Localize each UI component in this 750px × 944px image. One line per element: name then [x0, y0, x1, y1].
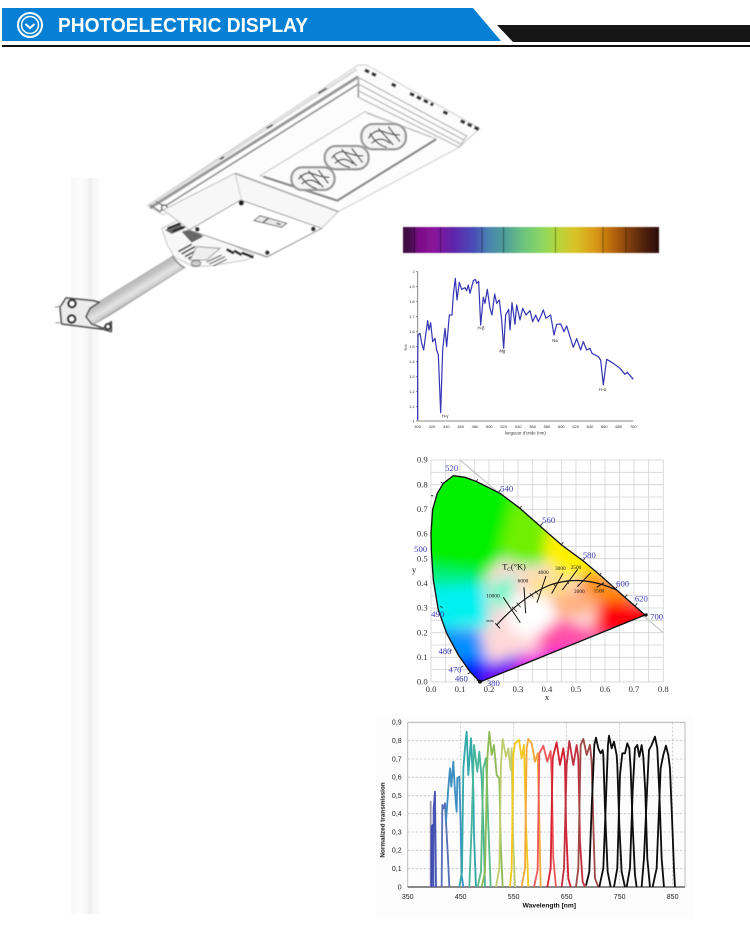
x axis numbers: 700 — [630, 424, 637, 429]
title: PHOTOELECTRIC DISPLAY — [58, 15, 309, 37]
line labels: H-α — [599, 387, 607, 392]
plot frame — [408, 722, 685, 887]
spectrum curve — [418, 278, 633, 420]
diagonal line — [460, 460, 663, 633]
x axis numbers: 0.2 — [484, 684, 494, 694]
y axis numbers: 0,5 — [392, 793, 402, 800]
x axis numbers: 580 — [544, 424, 551, 429]
y axis numbers: 0.7 — [417, 504, 428, 514]
y axis numbers: 0,3 — [392, 829, 402, 836]
lamp: top plate — [147, 65, 480, 215]
x axis title: Wavelength [nm] — [523, 903, 576, 910]
CIE chromaticity diagram — [412, 457, 668, 700]
x axis numbers: 0.8 — [658, 684, 669, 694]
x axis numbers — [402, 894, 679, 901]
x axis numbers: 450 — [455, 894, 467, 901]
line labels — [442, 325, 607, 418]
locus ticks — [431, 479, 647, 682]
black rule — [2, 45, 750, 47]
x axis numbers: 440 — [443, 424, 450, 429]
y axis numbers: 1,6 — [409, 329, 415, 334]
spectral locus outline — [431, 476, 645, 682]
line labels: Mg — [499, 349, 506, 354]
wavelength labels: 500 — [414, 544, 427, 554]
y axis title: Normalized transmission — [380, 782, 387, 858]
isotherm labels: 3000 — [555, 566, 566, 572]
y axis numbers: 0.1 — [417, 652, 428, 662]
LED 2 — [325, 146, 369, 169]
x axis title: longueur d'onde (nm) — [505, 431, 546, 436]
y axis numbers: 0.0 — [417, 677, 428, 687]
spectrum colour bar — [403, 227, 659, 253]
LED 3 — [291, 167, 335, 190]
y axis numbers: 0.8 — [417, 479, 428, 489]
x axis numbers: 520 — [500, 424, 508, 429]
x axis numbers: 460 — [457, 424, 465, 429]
planckian locus and isotherms — [495, 569, 617, 628]
header banner — [2, 8, 750, 47]
y axis numbers: 1,9 — [409, 284, 415, 289]
y axis numbers — [392, 720, 402, 891]
y axis numbers: 1 — [412, 418, 415, 423]
line labels: Na — [552, 338, 558, 343]
lamp: indicator window — [254, 216, 287, 227]
x axis numbers: 0.7 — [629, 684, 640, 694]
y axis numbers: 0,1 — [392, 866, 402, 873]
y axis numbers: 1,7 — [409, 314, 415, 319]
y axis numbers: 0.5 — [417, 553, 428, 563]
isotherm labels: ∞∞ — [486, 619, 494, 625]
LED 1 — [361, 124, 406, 149]
wavelength labels: 700 — [650, 611, 663, 621]
x axis numbers: 480 — [472, 424, 479, 429]
x axis numbers: 0.0 — [426, 684, 436, 694]
x axis numbers: 0.6 — [600, 684, 611, 694]
wavelength labels: 380 — [487, 678, 500, 688]
y axis numbers: 0.2 — [417, 627, 428, 637]
x axis numbers: 550 — [508, 894, 520, 901]
y axis numbers: 1,5 — [409, 344, 415, 349]
y axis numbers: 1,8 — [409, 299, 415, 304]
x axis numbers: 350 — [402, 894, 414, 901]
y axis numbers: 0,2 — [392, 848, 402, 855]
solar spectrum line chart — [403, 269, 637, 436]
y axis numbers: 0.6 — [417, 529, 428, 539]
x axis numbers: 620 — [572, 424, 580, 429]
filter transmission chart — [377, 715, 693, 918]
isotherm labels: C — [507, 567, 511, 573]
lamp: LED panel — [260, 112, 437, 201]
x axis numbers: 650 — [561, 894, 573, 901]
wavelength labels: 490 — [431, 609, 444, 619]
x axis numbers: 850 — [667, 894, 679, 901]
x axis numbers: 0.3 — [513, 684, 523, 694]
y axis numbers: 0,4 — [392, 811, 402, 818]
x axis numbers: 500 — [486, 424, 493, 429]
axes — [416, 272, 633, 421]
y axis title: flux — [403, 344, 408, 350]
grid — [431, 460, 663, 682]
x axis numbers: 640 — [587, 424, 594, 429]
lamp: heat sink — [162, 220, 254, 267]
y axis numbers: 1,3 — [409, 374, 415, 379]
wavelength labels: 540 — [500, 483, 513, 493]
y axis numbers: 1,2 — [409, 389, 415, 394]
x axis numbers: 400 — [414, 424, 422, 429]
wavelength labels: 600 — [616, 578, 629, 588]
y axis numbers: 0,8 — [392, 738, 402, 745]
isotherm labels: 10000 — [486, 593, 500, 599]
black ribbon — [497, 25, 750, 42]
pole — [70, 178, 100, 914]
y axis numbers: 0 — [398, 884, 402, 891]
gridlines — [408, 722, 685, 887]
wavelength labels: 560 — [542, 515, 555, 525]
x axis numbers — [414, 424, 637, 429]
y axis numbers: 0,6 — [392, 775, 402, 782]
y axis numbers: 2 — [412, 269, 415, 274]
y axis numbers — [409, 269, 415, 423]
isotherm labels: 2500 — [571, 565, 582, 571]
lamp: arm — [87, 256, 185, 325]
y axis numbers: 0,7 — [392, 756, 402, 763]
y axis numbers: 0,9 — [392, 720, 402, 727]
isotherm labels: 6000 — [518, 579, 529, 585]
x axis numbers: 680 — [615, 424, 623, 429]
wavelength labels: 520 — [445, 463, 458, 473]
plot backdrop — [377, 715, 693, 918]
colour gamut — [432, 476, 644, 681]
y axis numbers: 0.9 — [417, 455, 428, 465]
x axis numbers: 560 — [529, 424, 537, 429]
isotherm labels: 1500 — [594, 589, 605, 595]
wavelength labels: 470 — [449, 665, 461, 675]
isotherm labels: 2000 — [574, 589, 585, 595]
x axis numbers: 0.1 — [455, 684, 465, 694]
lamp: mounting bracket — [55, 298, 111, 332]
x axis numbers: 660 — [601, 424, 608, 429]
y axis numbers: 1,4 — [409, 359, 415, 364]
axis titles — [412, 565, 550, 702]
x axis numbers: 750 — [614, 894, 626, 901]
isotherm labels — [486, 562, 605, 625]
x axis numbers: 540 — [515, 424, 522, 429]
blue title ribbon — [2, 8, 501, 41]
x axis numbers — [426, 684, 669, 694]
line labels: H-β — [477, 325, 485, 330]
x axis numbers: 0.5 — [571, 684, 581, 694]
wavelength labels: 580 — [583, 550, 596, 560]
wavelength labels: 480 — [439, 646, 451, 656]
line labels: H-γ — [442, 413, 449, 418]
isotherm labels: (°K) — [511, 562, 526, 571]
wavelength labels: 620 — [635, 594, 648, 604]
lamp: battery box — [163, 173, 338, 257]
icon: down chevron in ring — [18, 13, 42, 37]
y axis numbers: 0.3 — [417, 603, 428, 613]
axis titles: x — [545, 692, 550, 702]
x axis numbers: 600 — [558, 424, 565, 429]
street lamp illustration — [55, 65, 480, 332]
x axis numbers: 420 — [429, 424, 436, 429]
wavelength labels: 460 — [455, 674, 468, 684]
isotherm labels: 4000 — [538, 570, 549, 576]
y axis numbers — [417, 455, 428, 687]
x axis numbers: 0.4 — [542, 684, 553, 694]
bandpass curves — [431, 732, 675, 887]
isotherm labels: T — [502, 562, 507, 571]
wavelength labels — [414, 463, 663, 688]
y axis numbers: 0.4 — [417, 578, 428, 588]
axis titles: y — [412, 565, 417, 575]
y axis numbers: 1,1 — [409, 404, 415, 409]
